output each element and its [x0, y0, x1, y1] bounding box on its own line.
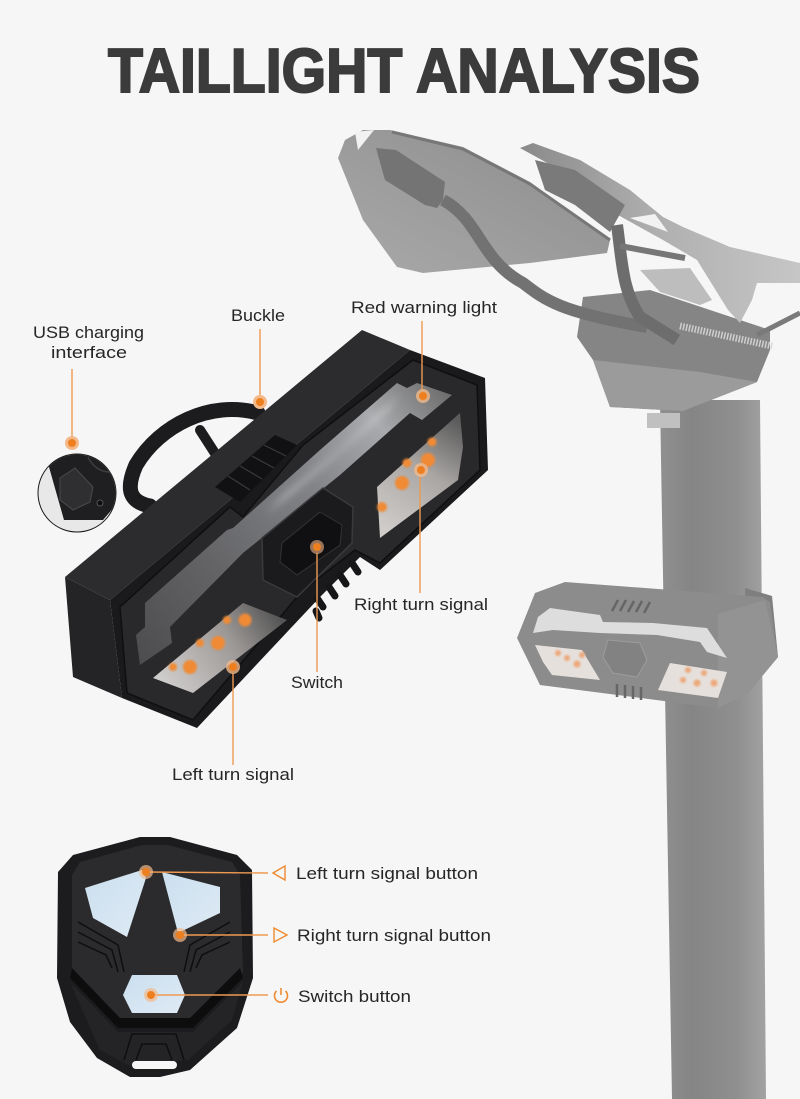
photo: faded seat post and saddle — [338, 130, 800, 1099]
callout: switch button: Switch button — [298, 987, 411, 1006]
clamp spring — [680, 326, 772, 346]
callout: left turn signal: Left turn signal — [172, 765, 294, 784]
remote black band — [70, 968, 243, 1028]
callout: USB charging interface: interface — [51, 343, 127, 362]
callout: switch button — [144, 987, 411, 1006]
LEDs — [169, 438, 436, 674]
right turn signal lens — [377, 413, 463, 538]
callout: left turn signal button — [139, 864, 478, 883]
callout: right turn signal — [354, 463, 488, 614]
small right signal — [658, 663, 727, 698]
saddle gap — [630, 214, 668, 232]
top fins — [215, 435, 297, 502]
small red light bar — [533, 608, 727, 658]
small taillight body — [517, 582, 778, 708]
remote body — [57, 837, 253, 1077]
switch button — [280, 512, 342, 575]
seat clamp — [577, 290, 770, 411]
clamp cross bar — [640, 268, 712, 305]
callout: USB charging interface: USB charging — [33, 323, 144, 342]
lower ribs — [316, 563, 358, 618]
callout: switch — [291, 540, 343, 692]
right button — [162, 872, 220, 933]
callout: right turn signal: Right turn signal — [354, 595, 488, 614]
remote inner face — [72, 845, 243, 1020]
switch housing — [262, 488, 353, 597]
saddle upper wing — [520, 143, 800, 323]
light bar glow — [265, 395, 400, 515]
small LEDs — [555, 650, 718, 686]
small ribs — [612, 600, 650, 700]
saddle rear shell — [338, 130, 610, 273]
remote lower bezel — [70, 982, 243, 1066]
remote control — [57, 837, 253, 1077]
callout: right turn signal button — [173, 926, 491, 945]
callout: buckle: Buckle — [231, 306, 285, 325]
inset: USB charging port — [38, 450, 120, 532]
seat post tube — [660, 400, 766, 1099]
left button — [85, 870, 146, 937]
callout: USB charging interface — [33, 323, 144, 450]
inner face panel — [120, 360, 480, 720]
callout: switch: Switch — [291, 673, 343, 692]
callout: right turn signal button: Right turn signal button — [297, 926, 491, 945]
left turn signal lens — [153, 603, 287, 693]
callout: red warning light: Red warning light — [351, 298, 497, 317]
buckle ring — [130, 410, 258, 506]
callout: buckle — [231, 306, 285, 409]
title: TAILLIGHT ANALYSIS — [108, 37, 700, 106]
remote ribs — [78, 922, 230, 1060]
front face of body — [110, 350, 488, 728]
small switch — [603, 640, 647, 677]
red warning light bar — [136, 383, 452, 665]
callout: left turn signal button: Left turn signal button — [296, 864, 478, 883]
post bolt — [647, 413, 680, 428]
mount strap — [745, 588, 778, 693]
callout: left turn signal — [172, 660, 294, 784]
left side of body — [65, 577, 122, 698]
small left signal — [535, 645, 600, 680]
saddle rails — [443, 200, 647, 327]
photo: main taillight — [65, 330, 488, 728]
lanyard slot — [132, 1061, 177, 1069]
top side of body — [65, 330, 410, 600]
callout: red warning light — [351, 298, 497, 403]
photo: faded taillight mounted on post — [517, 582, 778, 708]
switch button — [123, 975, 185, 1013]
